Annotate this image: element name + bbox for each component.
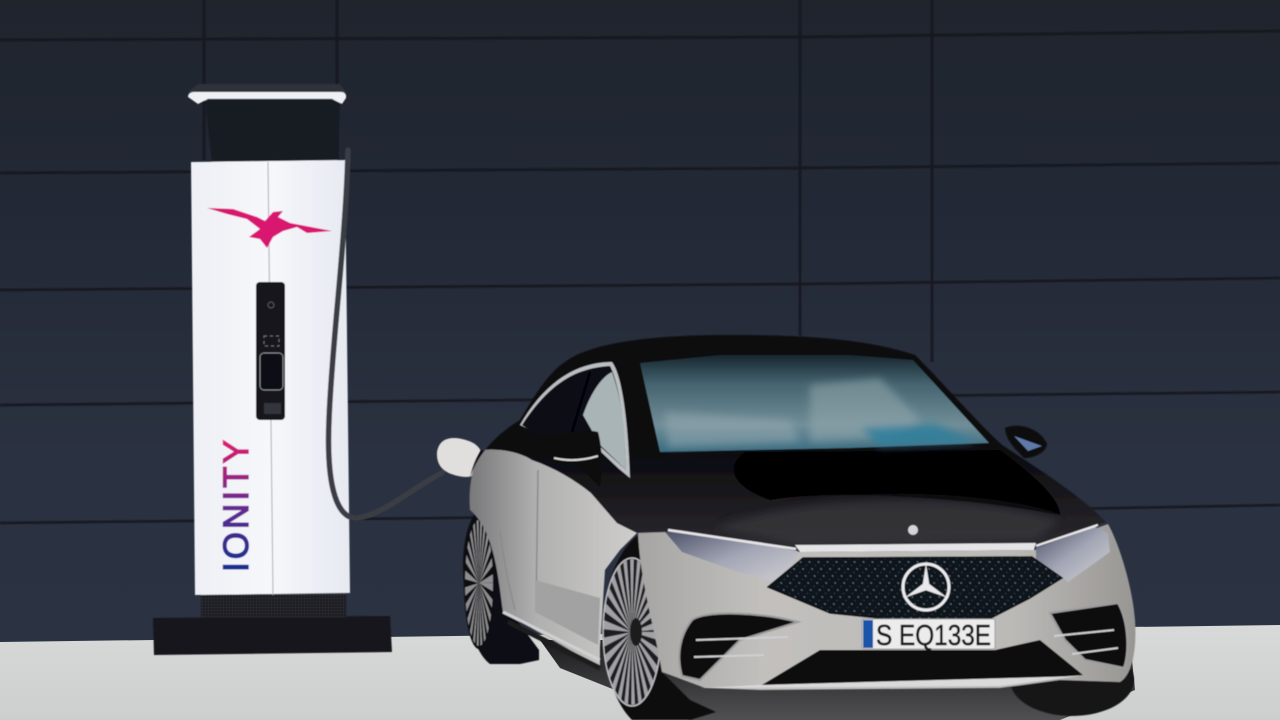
right headlamp bbox=[1036, 527, 1110, 582]
connector plug bbox=[437, 438, 482, 477]
left headlamp bbox=[665, 530, 798, 585]
licence plate: S EQ133E bbox=[876, 620, 991, 652]
silver front bumper bbox=[638, 524, 1135, 690]
plinth bbox=[153, 616, 392, 655]
logo: pink bird bbox=[207, 208, 332, 248]
front wheel bbox=[602, 535, 716, 720]
floor: pale concrete bbox=[0, 625, 1280, 720]
vent base bbox=[201, 594, 346, 618]
charging station bbox=[153, 84, 482, 655]
windscreen bbox=[640, 355, 989, 452]
logo: IONITY wordmark: IONITY bbox=[217, 440, 256, 572]
control console bbox=[256, 282, 285, 420]
far front tyre bbox=[1010, 644, 1134, 716]
charger body bbox=[191, 160, 350, 595]
door shading bbox=[500, 470, 538, 610]
black roof and shoulder bbox=[470, 335, 1106, 550]
rear wheel bbox=[463, 503, 539, 664]
side windows bbox=[520, 362, 630, 478]
lower intake bbox=[760, 640, 1083, 686]
hood badge bbox=[908, 525, 918, 535]
left mirror bbox=[552, 431, 602, 487]
silver side body bbox=[469, 449, 637, 667]
charging cable bbox=[329, 150, 442, 518]
sill bbox=[503, 612, 600, 660]
ground shadow below car bbox=[540, 640, 1135, 720]
star emblem bbox=[903, 564, 949, 610]
right air intake bbox=[1050, 603, 1127, 668]
grille panel bbox=[768, 557, 1062, 620]
canopy posts bbox=[205, 100, 340, 162]
right mirror bbox=[1005, 426, 1047, 458]
left air intake bbox=[679, 613, 798, 680]
car bbox=[463, 335, 1135, 720]
chrome strip bbox=[795, 543, 1036, 552]
hood reflection bbox=[734, 450, 1060, 515]
canopy bbox=[188, 84, 346, 104]
